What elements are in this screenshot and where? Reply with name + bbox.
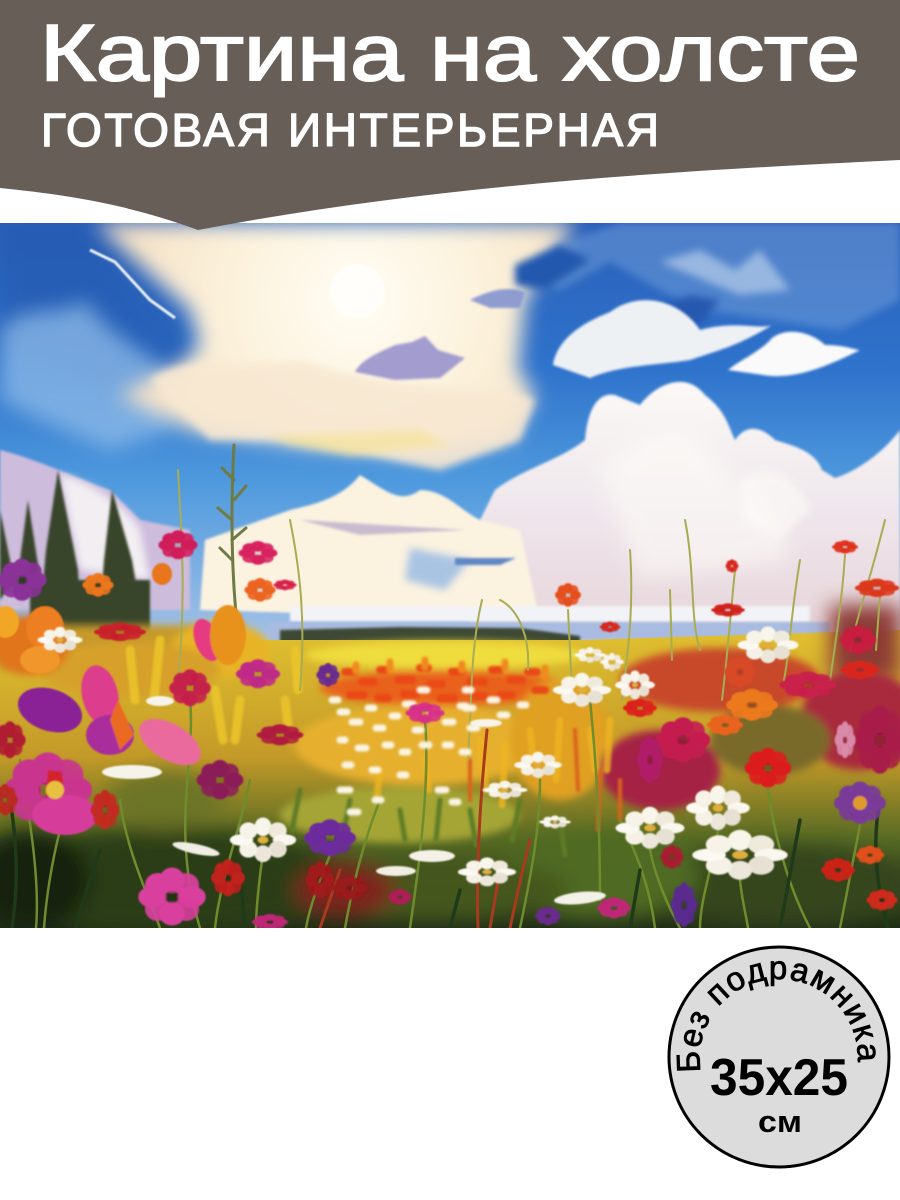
horizon [270,606,830,644]
subtitle: ГОТОВАЯ ИНТЕРЬЕРНАЯ [41,104,659,156]
wildflowers [0,530,900,930]
unit: см [758,1104,802,1139]
meadow underpainting [0,605,900,932]
white daisies [37,626,798,907]
brush strokes: orange and red poppies in the middle distance [345,660,545,698]
painting: flower meadow under a bright sky [0,223,900,932]
magenta cosmos, left [76,662,134,755]
title: Картина на холсте [40,8,860,97]
tall leafy stalk [218,445,246,650]
sky background [0,223,900,643]
sunlit cloud glow [95,223,575,455]
distant trees on the left [0,470,150,640]
purple petals, left [17,686,83,734]
badge: size and no stretcher [668,946,890,1168]
stems and grasses [10,470,888,928]
header band [0,0,900,230]
curved label: Без подрамника [676,960,876,1071]
badge circle [669,947,889,1167]
clouds [0,223,900,640]
sun [330,264,384,318]
brush strokes: yellow and ochre grasses [100,640,620,855]
cumulus clouds [470,382,900,640]
size number: 35x25 [710,1049,848,1107]
white field specks [332,690,526,812]
big cosmos, bottom left [4,753,98,835]
